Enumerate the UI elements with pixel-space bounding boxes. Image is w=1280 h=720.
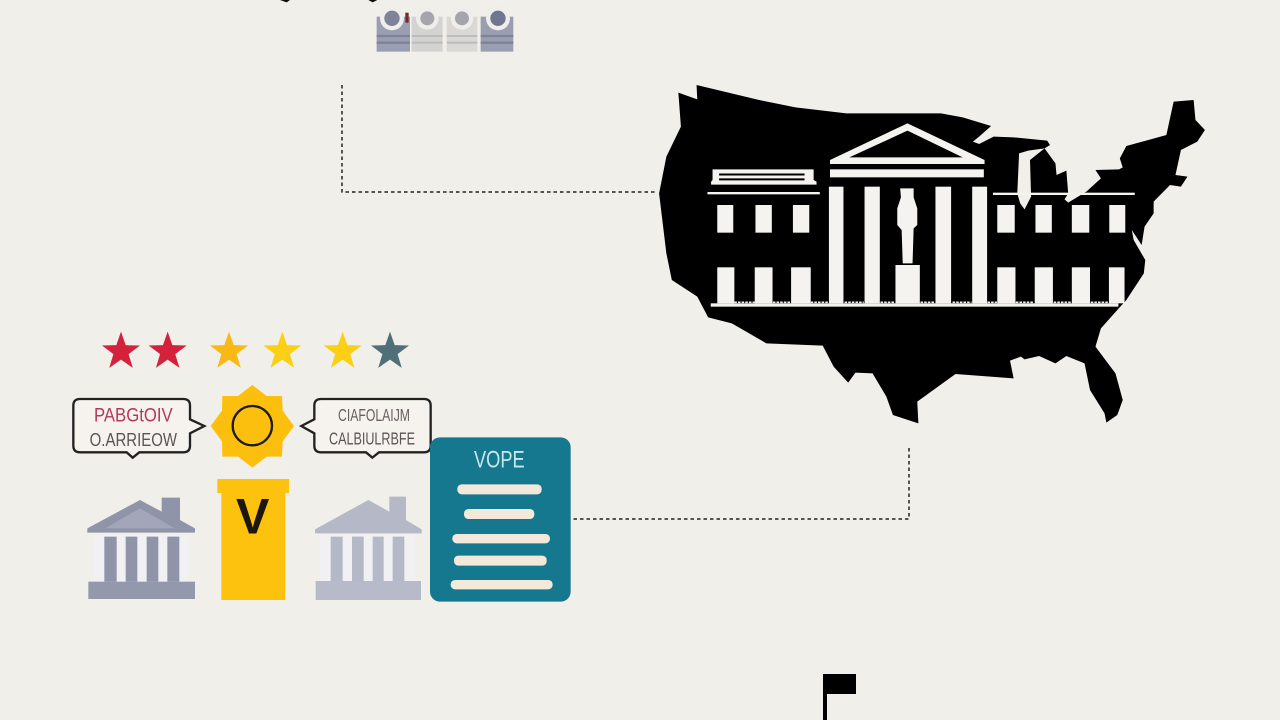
ballot card: teal VOTE document bbox=[430, 437, 571, 602]
arrow: dashed connector from top icons to map bbox=[342, 85, 655, 192]
arrow: dashed connector from map to ballot card bbox=[573, 448, 909, 519]
icon group: stars, speech bubbles, ballot and buildings bbox=[73, 332, 571, 602]
building: inner roof lines bbox=[719, 174, 805, 179]
icon: row of four grey monuments at top bbox=[280, 0, 513, 52]
speech bubble: right: CALBIULRBFE bbox=[329, 429, 415, 449]
icon: light grey building bbox=[315, 497, 422, 600]
speech bubble: left: PABGtOIV bbox=[94, 406, 173, 427]
speech bubble: left bbox=[73, 399, 204, 458]
icon: yellow sun with ring bbox=[211, 385, 294, 468]
ballot card: teal VOTE document: VOPE bbox=[474, 446, 525, 473]
speech bubble: right: CIAFOLAIJM bbox=[338, 405, 410, 425]
building: white facade bbox=[707, 123, 1135, 307]
building: dotted base detail bbox=[734, 300, 1108, 305]
ballot box: yellow column with V bbox=[217, 479, 289, 600]
map silhouette bbox=[659, 85, 1205, 423]
ballot box: yellow column with V: V bbox=[236, 488, 269, 544]
icon: dark grey building bbox=[87, 498, 195, 599]
map: United States silhouette with government building bbox=[659, 85, 1205, 423]
icon: black flag at bottom bbox=[823, 674, 856, 720]
speech bubble: left: O.ARRIEOW bbox=[90, 429, 177, 450]
speech bubble: right bbox=[301, 399, 431, 458]
stars row bbox=[102, 332, 409, 368]
